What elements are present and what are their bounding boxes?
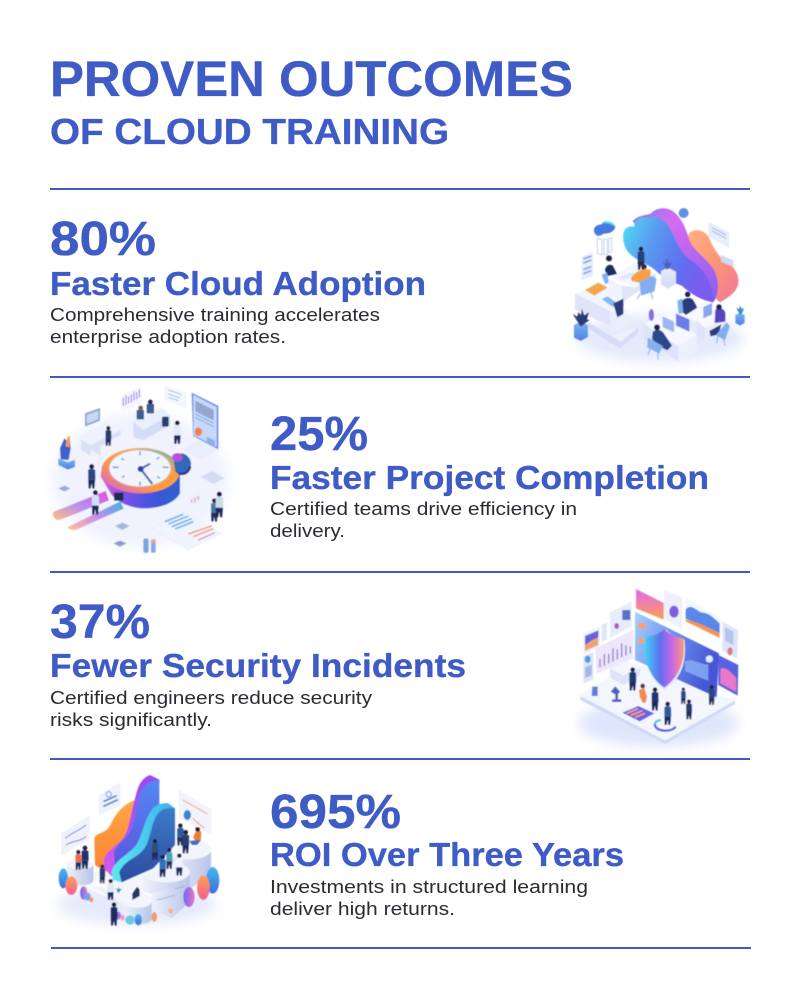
floating charts [62,817,89,855]
people [88,464,96,489]
console [610,661,640,676]
crystal [60,435,71,460]
panel: roi over three years: deliver high returns. [270,899,455,919]
floating panels [709,222,729,247]
right cylinders [168,840,211,888]
main screen [635,612,719,697]
right purple card [718,655,738,696]
plant [116,887,122,893]
left cylinder [67,860,93,885]
title [50,51,573,152]
vials [143,538,149,553]
cloud face [623,217,713,302]
panel: fewer security incidents [50,596,466,730]
base platform [582,665,733,740]
chips [58,486,70,491]
small cloud and hanging panels [594,222,615,236]
heading: fewer security incidents: Fewer Security Incidents [50,647,466,684]
panel: faster cloud adoption: enterprise adoption rates. [50,327,286,347]
phone panel [192,393,218,449]
title: OF CLOUD TRAINING [50,111,449,152]
floating bars [121,386,142,412]
illustration: shield [578,589,738,747]
front desk 2 [682,302,725,328]
stripes [53,491,109,520]
heading: faster project completion: Faster Project Completion [270,459,709,496]
cloud edge [633,208,718,302]
orange cloud [687,230,739,302]
title: PROVEN OUTCOMES [50,51,573,107]
illustration: growth chart [57,775,219,926]
blue wave face [114,780,159,872]
stat: 37%: 37% [50,596,150,649]
people [75,850,81,870]
front people [681,298,697,315]
left desk [78,422,121,445]
stat: 80%: 80% [50,213,156,266]
right plant [735,313,745,326]
left wall panels [610,601,632,638]
purple wave [104,775,159,877]
front cylinder [124,897,152,924]
cyan wave edge [112,803,175,882]
trees [59,868,68,888]
monitors [663,316,674,332]
panel: faster project completion: delivery. [270,521,345,541]
heading: roi over three years: ROI Over Three Years [270,836,624,873]
right desk [133,408,170,430]
knob [173,453,191,474]
people [629,667,636,691]
description: Certified teams drive efficiency in [270,499,577,519]
rear desk [610,263,657,287]
panel: faster cloud adoption [50,213,426,347]
document [152,512,222,550]
front desk 1 [643,312,697,347]
stat: 695%: 695% [270,786,401,839]
panel: faster project completion [270,408,709,541]
stat: 25%: 25% [270,408,368,461]
floor card [622,706,654,721]
orange wave [94,800,140,872]
left plant [574,322,588,341]
floor ring [655,724,676,731]
shield [647,630,685,690]
floating cube [679,208,689,218]
rear people [638,247,645,270]
floor [87,862,200,918]
stopwatch body [101,448,180,508]
panel: fewer security incidents: risks significantly. [50,710,212,730]
pedestal with plant [661,268,676,289]
panel: roi over three years [270,786,624,919]
illustration: stopwatch [52,386,228,553]
description: Certified engineers reduce security [50,688,372,708]
illustration: cloud office [573,208,745,362]
description: Comprehensive training accelerates [50,305,380,325]
top cards [636,589,664,620]
description: Investments in structured learning [270,877,588,897]
heading: faster cloud adoption: Faster Cloud Adoption [50,265,426,302]
dark wave face [119,808,175,882]
left step block [575,283,632,325]
